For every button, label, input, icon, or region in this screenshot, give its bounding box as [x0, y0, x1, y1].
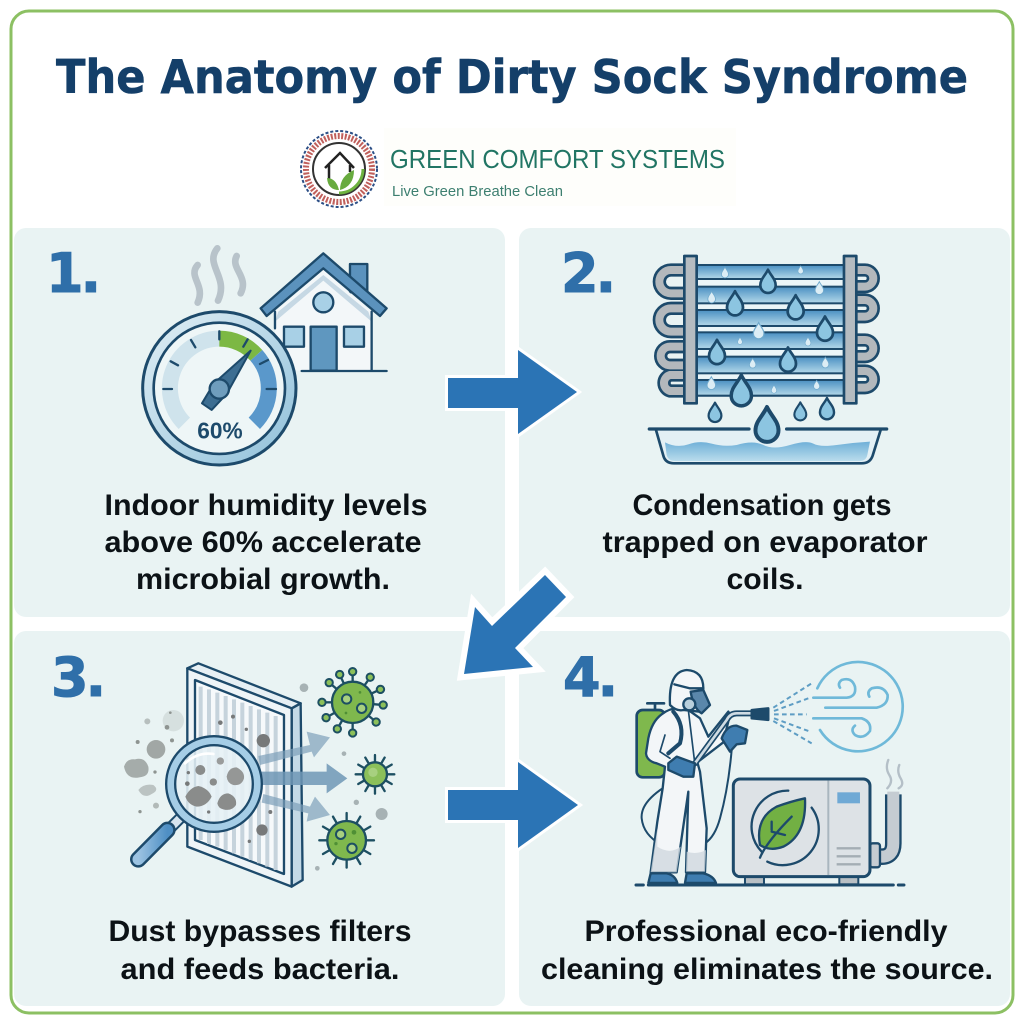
step number 4: 4.: [563, 646, 615, 709]
caption 2: Condensation gets: [632, 489, 892, 522]
arrow: step 2 to 3: [464, 575, 566, 674]
AC unit: [733, 760, 902, 884]
panel 2: condensation: [519, 228, 1010, 617]
caption 3: and feeds bacteria.: [120, 953, 400, 986]
dust on filter: [218, 715, 272, 843]
icon: filter, magnifier and bacteria: [124, 663, 394, 887]
gauge: 60%: [197, 417, 243, 443]
caption 4: Professional eco-friendly: [584, 915, 948, 948]
tube bands: [695, 265, 845, 396]
ground line: [636, 880, 904, 889]
panel 1: humidity: [14, 228, 505, 617]
caption 3: Dust bypasses filters: [108, 915, 412, 948]
logo: Green Comfort Systems: [301, 128, 736, 207]
pipe bends: [659, 270, 873, 391]
leaf emblem: [752, 791, 819, 865]
caption 2: trapped on evaporator: [602, 526, 928, 559]
arrow: step 3 to 4: [448, 762, 578, 848]
icon: technician spraying AC unit: [636, 662, 904, 885]
caption 1: Indoor humidity levels: [104, 489, 428, 522]
step number 3: 3.: [51, 646, 103, 709]
drip pan: [649, 429, 887, 463]
caption 4: [541, 915, 993, 986]
logo name: GREEN COMFORT SYSTEMS: [390, 144, 725, 174]
step number 2: 2.: [561, 242, 613, 305]
small droplets: [707, 266, 829, 393]
house: [261, 253, 387, 371]
spray mist: [773, 683, 812, 743]
logo badge: [301, 131, 377, 207]
step number 1: 1.: [46, 242, 98, 305]
hood and respirator: [670, 670, 710, 713]
caption 1: [104, 489, 428, 596]
filter pleats: [201, 687, 276, 870]
arrow: step 1 to 2: [448, 350, 577, 434]
hoses: [642, 750, 732, 845]
bacterium top: [318, 668, 387, 737]
airflow arrows: [258, 732, 347, 822]
caption 3: [108, 915, 412, 986]
caption 2: [602, 489, 928, 596]
backpack tank: [637, 703, 665, 777]
caption 1: microbial growth.: [136, 563, 390, 596]
magnifying glass: [138, 741, 257, 859]
caption 2: coils.: [726, 563, 804, 596]
backpack strap: [668, 712, 681, 753]
bacterium bottom: [319, 813, 374, 868]
panel 3: dust and bacteria: [14, 631, 505, 1006]
panel 4: professional cleaning: [519, 631, 1010, 1006]
steam: [194, 248, 243, 303]
gauge: [143, 312, 296, 465]
bacterium middle: [356, 755, 394, 794]
caption 1: above 60% accelerate: [104, 526, 422, 559]
large droplets: [709, 270, 834, 442]
clean air icon: [813, 662, 903, 751]
title: The Anatomy of Dirty Sock Syndrome: [56, 50, 968, 104]
technician suit: [646, 670, 768, 883]
spray wand: [695, 713, 753, 763]
gloves: [668, 757, 695, 777]
icon: humidity gauge and house: [143, 248, 387, 465]
pipe: [870, 760, 902, 867]
dust cloud: [124, 710, 184, 813]
filter frame: [187, 663, 303, 887]
particles: [300, 683, 388, 871]
logo tagline: Live Green Breathe Clean: [392, 184, 563, 200]
side headers: [684, 256, 856, 403]
caption 4: cleaning eliminates the source.: [541, 953, 993, 986]
icon: evaporator coil with drip pan: [649, 256, 887, 463]
